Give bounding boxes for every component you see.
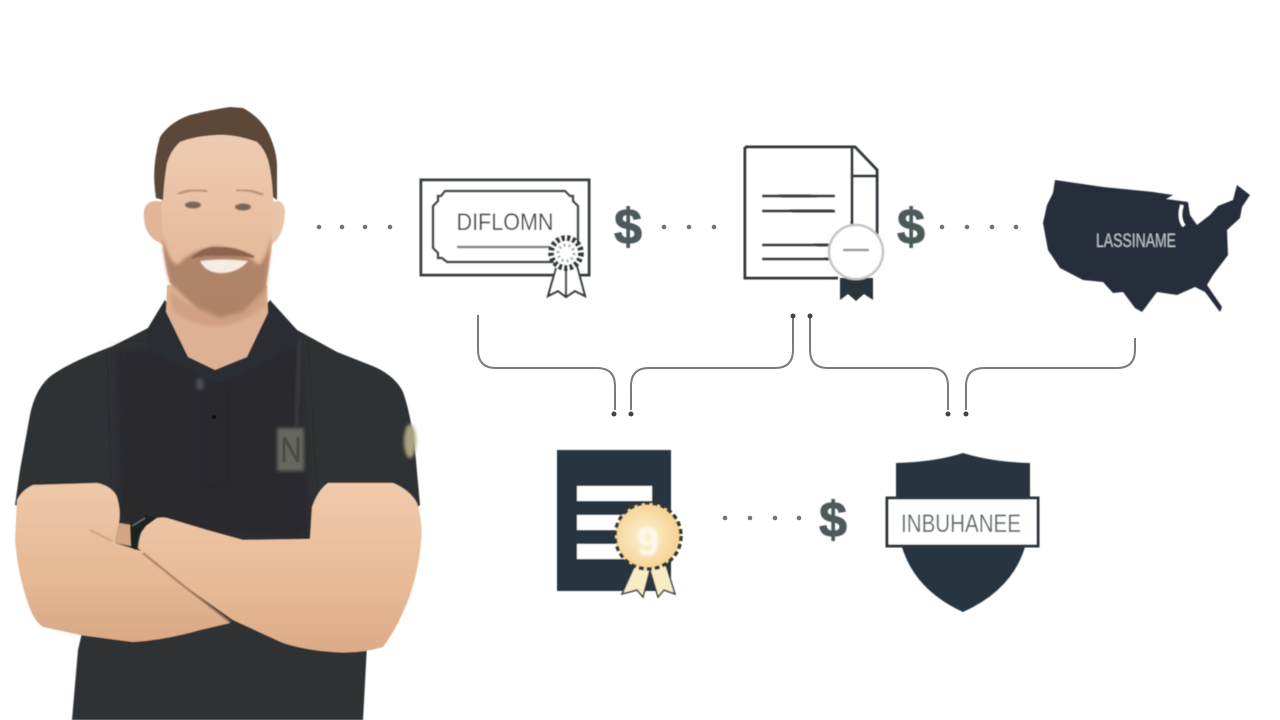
shield body bbox=[896, 453, 1030, 612]
collar right flap bbox=[215, 302, 297, 385]
wristwatch bbox=[130, 515, 157, 550]
map silhouette bbox=[1043, 180, 1250, 312]
gold seal bbox=[615, 503, 681, 569]
right eyebrow bbox=[236, 190, 263, 195]
right arm over left bbox=[138, 483, 422, 652]
diploma label: DIFLOMN bbox=[456, 209, 554, 236]
dotted arrow: license to insurance bbox=[723, 516, 801, 520]
gold ribbon bbox=[622, 562, 675, 597]
icon: insurance shield bbox=[887, 453, 1038, 612]
left upper arm and forearm bbox=[15, 483, 230, 642]
sleeve patch bbox=[404, 424, 416, 458]
forearm fold line bbox=[143, 553, 230, 622]
person with crossed arms bbox=[15, 107, 422, 720]
dotted arrow: diploma to document bbox=[662, 225, 716, 229]
face bbox=[160, 125, 274, 318]
chest badge bbox=[277, 428, 304, 471]
elbow crease bbox=[90, 530, 112, 541]
diploma seal bbox=[551, 238, 581, 268]
connector end dots bbox=[612, 314, 968, 416]
hand behind watch bbox=[115, 523, 136, 547]
map label: LASSINAME bbox=[1096, 231, 1176, 252]
great lake notch bbox=[1180, 205, 1184, 226]
moustache bbox=[192, 248, 254, 258]
left eye bbox=[185, 202, 201, 208]
neck bbox=[166, 285, 268, 370]
teeth bbox=[200, 260, 248, 273]
white seal bbox=[829, 225, 883, 279]
insurance banner bbox=[887, 498, 1038, 546]
placket and buttons bbox=[196, 378, 225, 485]
icon: license document with gold seal bbox=[557, 450, 681, 597]
scalloped inner border bbox=[433, 191, 578, 262]
seal glyph: 9 bbox=[637, 520, 659, 564]
vertical shirt seam bbox=[296, 340, 300, 428]
neck shadow bbox=[170, 285, 266, 326]
connector: map to insurance bbox=[966, 338, 1135, 410]
dotted arrow: document to map bbox=[940, 225, 1018, 229]
seal dash bbox=[843, 249, 869, 251]
dollar sign 2: $ bbox=[897, 199, 925, 255]
beard stubble bbox=[163, 235, 271, 318]
signature line bbox=[457, 246, 550, 248]
dollar sign 1: $ bbox=[614, 199, 642, 255]
diploma frame bbox=[421, 180, 589, 275]
page fold bbox=[852, 147, 877, 228]
right ear bbox=[265, 201, 285, 250]
document outline bbox=[745, 147, 877, 278]
right eye bbox=[235, 204, 251, 210]
dotted arrow: person to diploma bbox=[317, 225, 392, 229]
text lines bbox=[762, 196, 835, 259]
dollar sign 3: $ bbox=[819, 492, 847, 548]
insurance label: INBUHANEE bbox=[901, 510, 1021, 538]
icon: USA license map bbox=[1043, 180, 1250, 312]
polo shirt bbox=[15, 300, 420, 720]
connector: diploma to license bbox=[478, 315, 615, 410]
diploma ribbon bbox=[548, 262, 585, 297]
icon: diploma bbox=[421, 180, 589, 297]
connector: document to insurance bbox=[810, 318, 948, 410]
document ribbon bbox=[840, 278, 873, 301]
connector: document to license bbox=[631, 318, 793, 410]
icon: certificate document bbox=[745, 147, 883, 301]
darker torso shading bbox=[115, 340, 312, 540]
white bars bbox=[577, 486, 652, 559]
dark document bbox=[557, 450, 671, 591]
hair bbox=[154, 107, 277, 200]
left ear bbox=[144, 201, 170, 250]
left eyebrow bbox=[178, 190, 207, 194]
connector lines bbox=[478, 315, 1135, 410]
collar left flap bbox=[146, 300, 215, 385]
